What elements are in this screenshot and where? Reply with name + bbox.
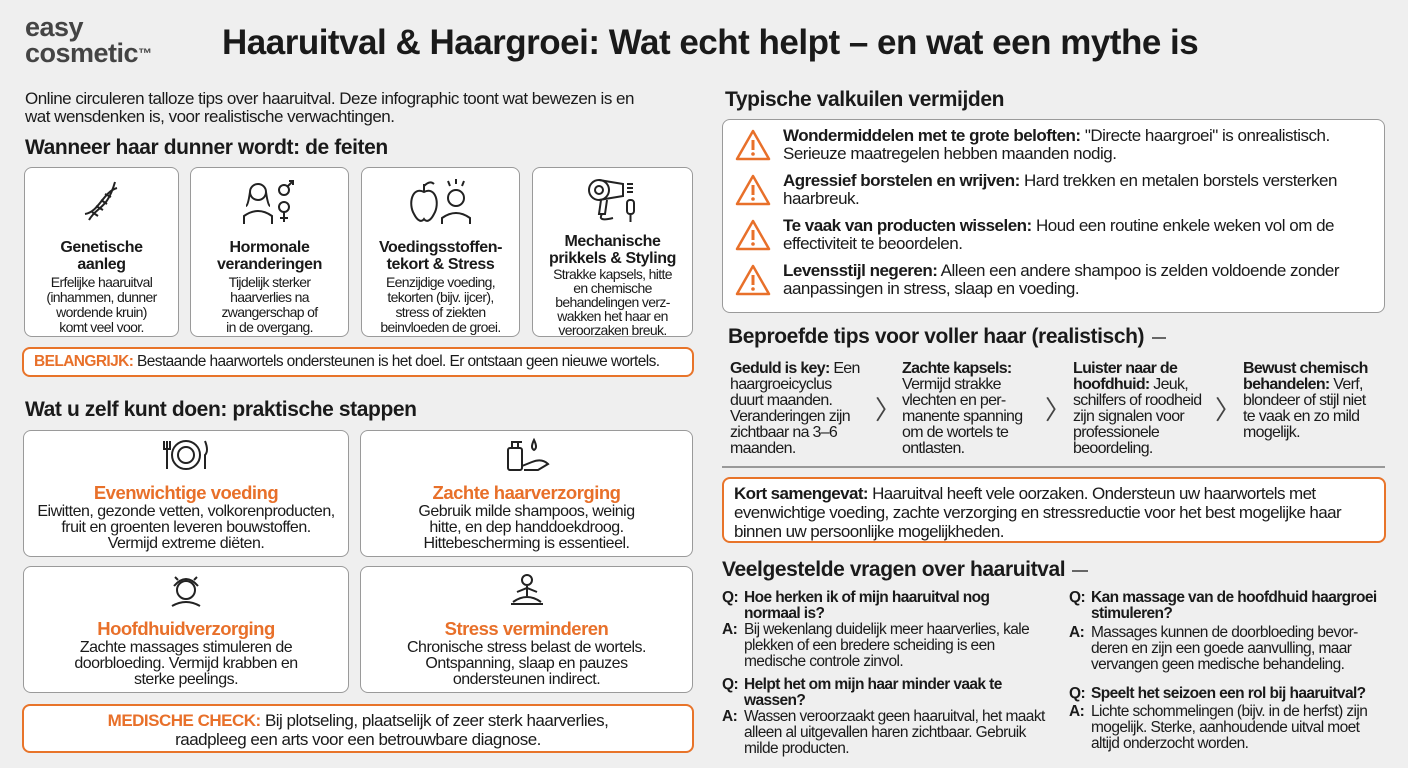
card: hormonale veranderingen: Tijdelijk sterker [229,274,310,290]
card: voedingsstoffentekort [361,167,520,337]
icon: bottle and hand [507,438,550,471]
faq 1: Q: [722,589,738,606]
arrow 2: 〉 [1045,395,1071,425]
card: hormonale veranderingen: Hormonale [230,239,309,256]
intro text: Online circuleren talloze tips over haaruitval. Deze infographic toont wat bewezen is en [25,89,634,108]
intro text [25,89,634,126]
card: stress verminderen: ondersteunen indirect. [453,671,600,688]
callout: belangrijk [22,347,694,377]
faq 1 [722,589,1030,670]
card: genetische aanleg: (inhammen, dunner [46,289,157,305]
faq 4: Lichte schommelingen (bijv. in de herfst) zijn mogelijk. Sterke, aanhoudende uitval moet altijd onderzocht worden. [1091,703,1367,752]
card: stress verminderen: Stress verminderen [445,618,608,639]
card: hormonale veranderingen [190,167,349,337]
card: mechanische prikkels [532,167,693,337]
card: evenwichtige voeding: fruit en groenten leveren bouwstoffen. [61,519,311,536]
card: evenwichtige voeding: Evenwichtige voeding [94,482,278,503]
intro text: wat wensdenken is, voor realistische verwachtingen. [25,107,394,126]
faq 1: A: [722,621,737,638]
faq 3 [1069,589,1377,673]
card: voedingsstoffentekort: Voedingsstoffen- [379,239,502,256]
card: evenwichtige voeding: Vermijd extreme diëten. [108,535,264,552]
card: hormonale veranderingen: haarverlies na [230,289,309,305]
card: mechanische prikkels: Strakke kapsels, hitte [553,266,672,282]
icon: hair dryer and brush [588,179,635,222]
faq 4: Q: [1069,685,1085,702]
card: zachte haarverzorging: Zachte haarverzorging [433,482,620,503]
tip 4: Bewust chemisch behandelen: Verf, blondeer of stijl niet te vaak en zo mild mogelijk. [1243,360,1368,441]
card: voedingsstoffentekort: stress of ziekten [395,304,486,320]
faq 1: Hoe herken ik of mijn haaruitval nog normaal is? [744,589,989,622]
card: mechanische prikkels: prikkels & Styling [549,250,676,267]
faq 3: A: [1069,624,1084,641]
pitfall 1: Wondermiddelen met te grote beloften: "Directe haargroei" is onrealistisch. Serieuze maatregelen hebben maanden nodig. [783,126,1330,163]
card: zachte haarverzorging: Gebruik milde shampoos, weinig [418,503,635,520]
callout: medische check: MEDISCHE CHECK: Bij plotseling, plaatselijk of zeer sterk haarverlies, [108,711,608,730]
callout: medische check: raadpleeg een arts voor een betrouwbare diagnose. [175,730,541,749]
card: mechanische prikkels: behandelingen verz- [555,294,670,310]
tip 1: Geduld is key: Een haargroeicyclus duurt maanden. Veranderingen zijn zichtbaar na 3–6 maanden. [730,360,860,457]
icon: meditation [511,574,543,605]
faq 2: Helpt het om mijn haar minder vaak te wassen? [744,676,1002,709]
card: evenwichtige voeding: Eiwitten, gezonde vetten, volkorenproducten, [37,503,335,520]
logo: cosmetic™ [25,38,152,68]
arrow 3: 〉 [1215,395,1241,425]
card: zachte haarverzorging: Hittebescherming is essentieel. [424,535,629,552]
faq 3: Q: [1069,589,1085,606]
card: voedingsstoffentekort: beinvloeden de groei. [380,319,501,335]
heading: valkuilen: Typische valkuilen vermijden [725,88,1004,111]
card: hoofdhuidverzorging: sterke peelings. [134,671,238,688]
card: voedingsstoffentekort: Eenzijdige voeding, [386,274,495,290]
faq 2: Wassen veroorzaakt geen haaruitval, het maakt alleen al uitgevallen haren zichtbaar. Gebruik milde producten. [744,708,1045,757]
faq 2: A: [722,708,737,725]
pitfall 2: Agressief borstelen en wrijven: Hard trekken en metalen borstels versterken haarbreuk. [783,171,1337,208]
card: hoofdhuidverzorging: Hoofdhuidverzorging [97,618,275,639]
faq 2 [722,676,1046,757]
faq 4: Speelt het seizoen een rol bij haaruitval? [1091,685,1366,702]
faq 3: Massages kunnen de doorbloeding bevor-deren en zijn een goede aanvulling, maar vervangen geen medische behandeling. [1091,624,1358,673]
logo: easy [25,12,83,42]
heading: beproefde tips: Beproefde tips voor voller haar (realistisch) [728,325,1144,348]
card: mechanische prikkels: Mechanische [564,233,661,250]
card: hoofdhuidverzorging [23,566,349,693]
faq 4: A: [1069,703,1084,720]
title: Haaruitval & Haargroei: Wat echt helpt – en wat een mythe is [222,23,1198,62]
faq 2: Q: [722,676,738,693]
heading: feiten: Wanneer haar dunner wordt: de feiten [25,136,388,159]
callout: kort samengevat: Kort samengevat: Haaruitval heeft vele oorzaken. Ondersteun uw haarwortels met evenwichtige voeding, zachte verzorging en stressreductie voor het best mogelijke haar binnen uw persoonlijke mogelijkheden. [734,484,1341,541]
icon: woman and gender symbols [243,180,294,224]
card: voedingsstoffentekort: tekort & Stress [387,256,494,273]
card: genetische aanleg: Erfelijke haaruitval [51,274,152,290]
card: mechanische prikkels: veroorzaken breuk. [558,322,667,338]
card: hormonale veranderingen: in de overgang. [226,319,313,335]
card: genetische aanleg: Genetische [60,239,143,256]
heading: zelf doen: Wat u zelf kunt doen: praktische stappen [25,398,417,421]
card: voedingsstoffentekort: tekorten (bijv. ijcer), [387,289,494,305]
tip 2: Zachte kapsels: Vermijd strakke vlechten en per-manente spanning om de wortels te ontlasten. [902,360,1022,457]
card: mechanische prikkels: en chemische [573,280,652,296]
pitfall 4: Levensstijl negeren: Alleen een andere shampoo is zelden voldoende zonder aanpassingen in stress, slaap en voeding. [783,261,1339,298]
card: hoofdhuidverzorging: Zachte massages stimuleren de [80,639,292,656]
card: stress verminderen: Ontspanning, slaap en pauzes [425,655,628,672]
card: genetische aanleg: aanleg [77,256,126,273]
card: stress verminderen [360,566,693,693]
callout: medische check [22,704,694,753]
icon: dna [84,182,118,220]
pitfall 3: Te vaak van producten wisselen: Houd een routine enkele weken vol om de effectiviteit te beoordelen. [783,216,1334,253]
card: zachte haarverzorging [360,430,693,557]
tip 3: Luister naar de hoofdhuid: Jeuk, schilfers of roodheid zijn signalen voor professionele beoordeling. [1073,360,1202,457]
faq 1: Bij wekenlang duidelijk meer haarverlies, kale plekken of een bredere scheiding is een medische controle zinvol. [744,621,1029,670]
card: mechanische prikkels: wakken het haar en [557,308,668,324]
callout: belangrijk: BELANGRIJK: Bestaande haarwortels ondersteunen is het doel. Er ontstaan geen nieuwe wortels. [34,353,659,370]
card: zachte haarverzorging: hitte, en dep handdoekdroog. [429,519,624,536]
panel: valkuilen [722,119,1385,313]
logo [25,12,152,68]
card: stress verminderen: Chronische stress belast de wortels. [407,639,646,656]
card: genetische aanleg: komt veel voor. [59,319,144,335]
faq 3: Kan massage van de hoofdhuid haargroei stimuleren? [1091,589,1377,622]
card: genetische aanleg [24,167,179,337]
heading: faq: Veelgestelde vragen over haaruitval [722,558,1065,581]
card: hormonale veranderingen: veranderingen [217,256,322,273]
arrow 1: 〉 [875,395,901,425]
card: evenwichtige voeding [23,430,349,557]
icon: head massage [172,576,200,607]
card: hoofdhuidverzorging: doorbloeding. Vermijd krabben en [74,655,298,672]
card: genetische aanleg: wordende kruin) [56,304,147,320]
card: hormonale veranderingen: zwangerschap of [221,304,318,320]
icon: apple and stressed person [410,179,471,224]
faq 4 [1069,685,1367,752]
icon: plate [163,440,208,470]
